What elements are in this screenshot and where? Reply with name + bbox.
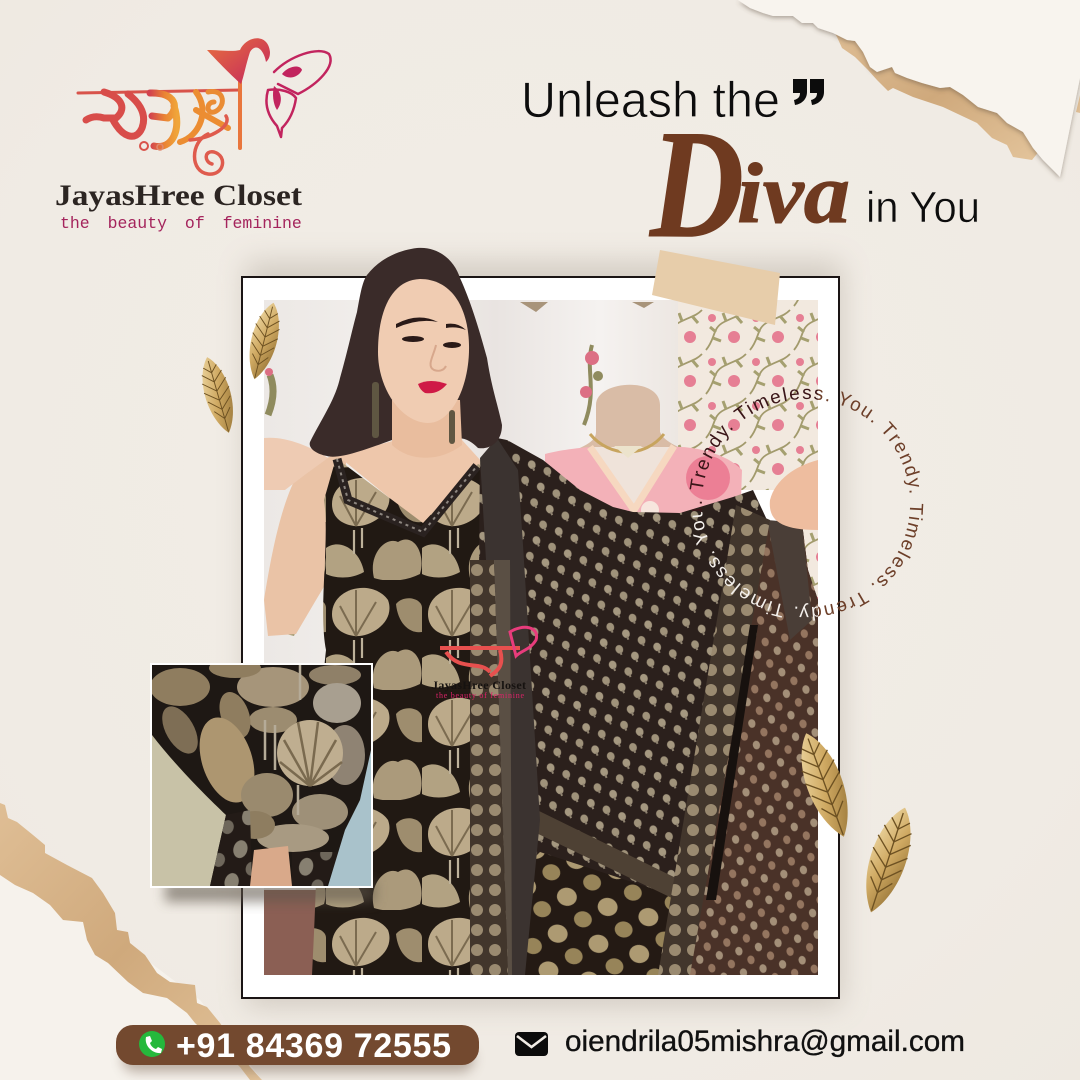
mannequin: [580, 384, 678, 504]
floral fabric: [678, 300, 818, 490]
head and hair: [310, 248, 502, 458]
skin: [250, 846, 292, 886]
printed leaves: [150, 658, 365, 852]
eyes and brows: [396, 317, 466, 348]
icon: envelope: [515, 1032, 548, 1056]
dupatta left border: [470, 560, 508, 975]
dupatta lower right panel: [690, 528, 818, 975]
icon: gold leaf right: [789, 727, 861, 843]
logo name: JayasHree Closet: [55, 179, 302, 212]
dupatta bottom gold band: [515, 852, 672, 975]
dupatta fabric: [470, 438, 818, 975]
neck: [392, 400, 462, 458]
contact: email: oiendrila05mishra@gmail.com: [565, 1025, 965, 1058]
torn paper: bottom left: [0, 803, 262, 1080]
phone number: +91 84369 72555: [176, 1027, 451, 1065]
photo frame shadow: [246, 262, 842, 1006]
blue background: [328, 750, 371, 886]
hand on shoulder: [264, 438, 328, 490]
icon: gold leaf left: [195, 354, 241, 436]
contact: phone pill: [116, 1025, 479, 1065]
arm and shoulder: [264, 450, 352, 636]
dupatta black stripe: [706, 625, 758, 900]
heading: Unleash the: Unleash the: [521, 72, 780, 128]
panel: photo frame: [242, 277, 839, 998]
tape: [652, 250, 780, 325]
earrings: [372, 382, 455, 444]
right hand: [770, 460, 818, 530]
neck and chest: [346, 438, 480, 523]
nose shadow: [431, 345, 446, 371]
watermark logo: JayasHree Closet: [432, 678, 526, 692]
small flower sprigs: [265, 302, 654, 636]
dupatta vertical border: [658, 505, 770, 975]
logo tagline: the beauty of feminine: [60, 214, 302, 233]
inset: fabric close-up: [150, 658, 373, 888]
inset shadow: [165, 882, 375, 902]
heading: Diva: D: [648, 98, 744, 270]
kurta with lotus print: [312, 458, 480, 975]
dupatta inner grey fold: [480, 438, 540, 975]
contact pill shadow: [122, 1046, 474, 1072]
pink top on mannequin: [545, 446, 742, 513]
curtain backdrop: [264, 300, 678, 890]
background bottom embroidery: [264, 890, 316, 975]
icon: gold leaf upper: [242, 300, 286, 382]
beige background: [152, 735, 226, 886]
lower cuff print: [210, 810, 252, 886]
lips: [418, 381, 447, 393]
heading: Diva: iva: [737, 145, 850, 241]
torn paper: top right: [738, 0, 1080, 177]
icon: logo mark with butterfly figure: [78, 51, 331, 174]
fan leaf veins: [280, 722, 342, 786]
watermark logo: [432, 627, 537, 700]
icon: gold leaf far right: [854, 802, 922, 918]
watermark logo: the beauty of feminine: [436, 691, 524, 700]
photo: woman in printed suit and dupatta: [264, 300, 818, 980]
dupatta right edge: [767, 520, 812, 640]
icon: whatsapp: [139, 1031, 165, 1057]
icon: quotation mark: [793, 79, 824, 105]
heading: in You: in You: [866, 183, 980, 232]
hair: [310, 248, 502, 457]
logo: JayasHree Closet: [55, 38, 331, 233]
face: [378, 279, 469, 423]
circular text: You. Trendy. Timeless. Trendy. Timeless. You. Trendy. Timeless.: [690, 387, 924, 621]
neckline embellishment: [337, 459, 477, 532]
